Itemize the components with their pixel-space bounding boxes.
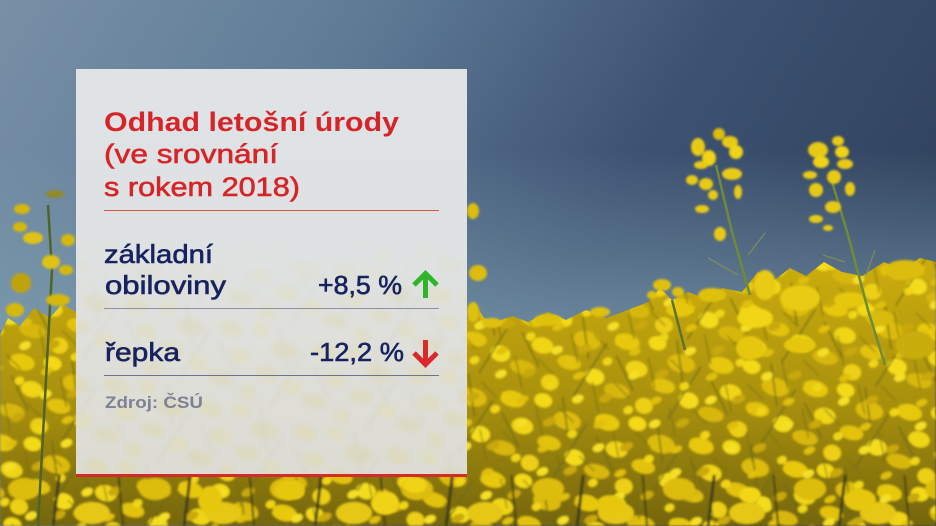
icon: flowers at panel edge [467, 203, 487, 281]
title [104, 107, 399, 202]
row: řepka: řepka [105, 337, 181, 367]
row: základní obiloviny [104, 239, 402, 300]
title divider [104, 210, 439, 211]
row divider [104, 375, 439, 376]
source: Zdroj: ČSÚ [105, 393, 203, 412]
icon: right rapeseed plant stems [38, 165, 885, 526]
icon: left flower spike [686, 128, 743, 241]
row divider [104, 308, 439, 309]
icon: red down arrow [414, 340, 437, 364]
row: základní obiloviny: obiloviny [105, 270, 226, 300]
icon: green up arrow [414, 274, 437, 298]
title: Odhad letošní úrody [104, 107, 399, 137]
panel: harvest estimate [76, 69, 467, 477]
icon: left rapeseed plant [6, 190, 75, 317]
row: základní obiloviny: +8,5 % [318, 270, 402, 300]
row: řepka [105, 337, 404, 367]
panel bottom red bar [76, 474, 467, 477]
title: s rokem 2018) [104, 172, 300, 202]
row: řepka: -12,2 % [310, 337, 404, 367]
background: large flower clusters in foreground [198, 260, 935, 515]
row: základní obiloviny: základní [104, 239, 214, 269]
icon: small flower spike near horizon [467, 279, 726, 328]
title: (ve srovnání [104, 139, 279, 169]
icon: right flower spike [803, 136, 855, 231]
background: rapeseed field [0, 255, 936, 526]
